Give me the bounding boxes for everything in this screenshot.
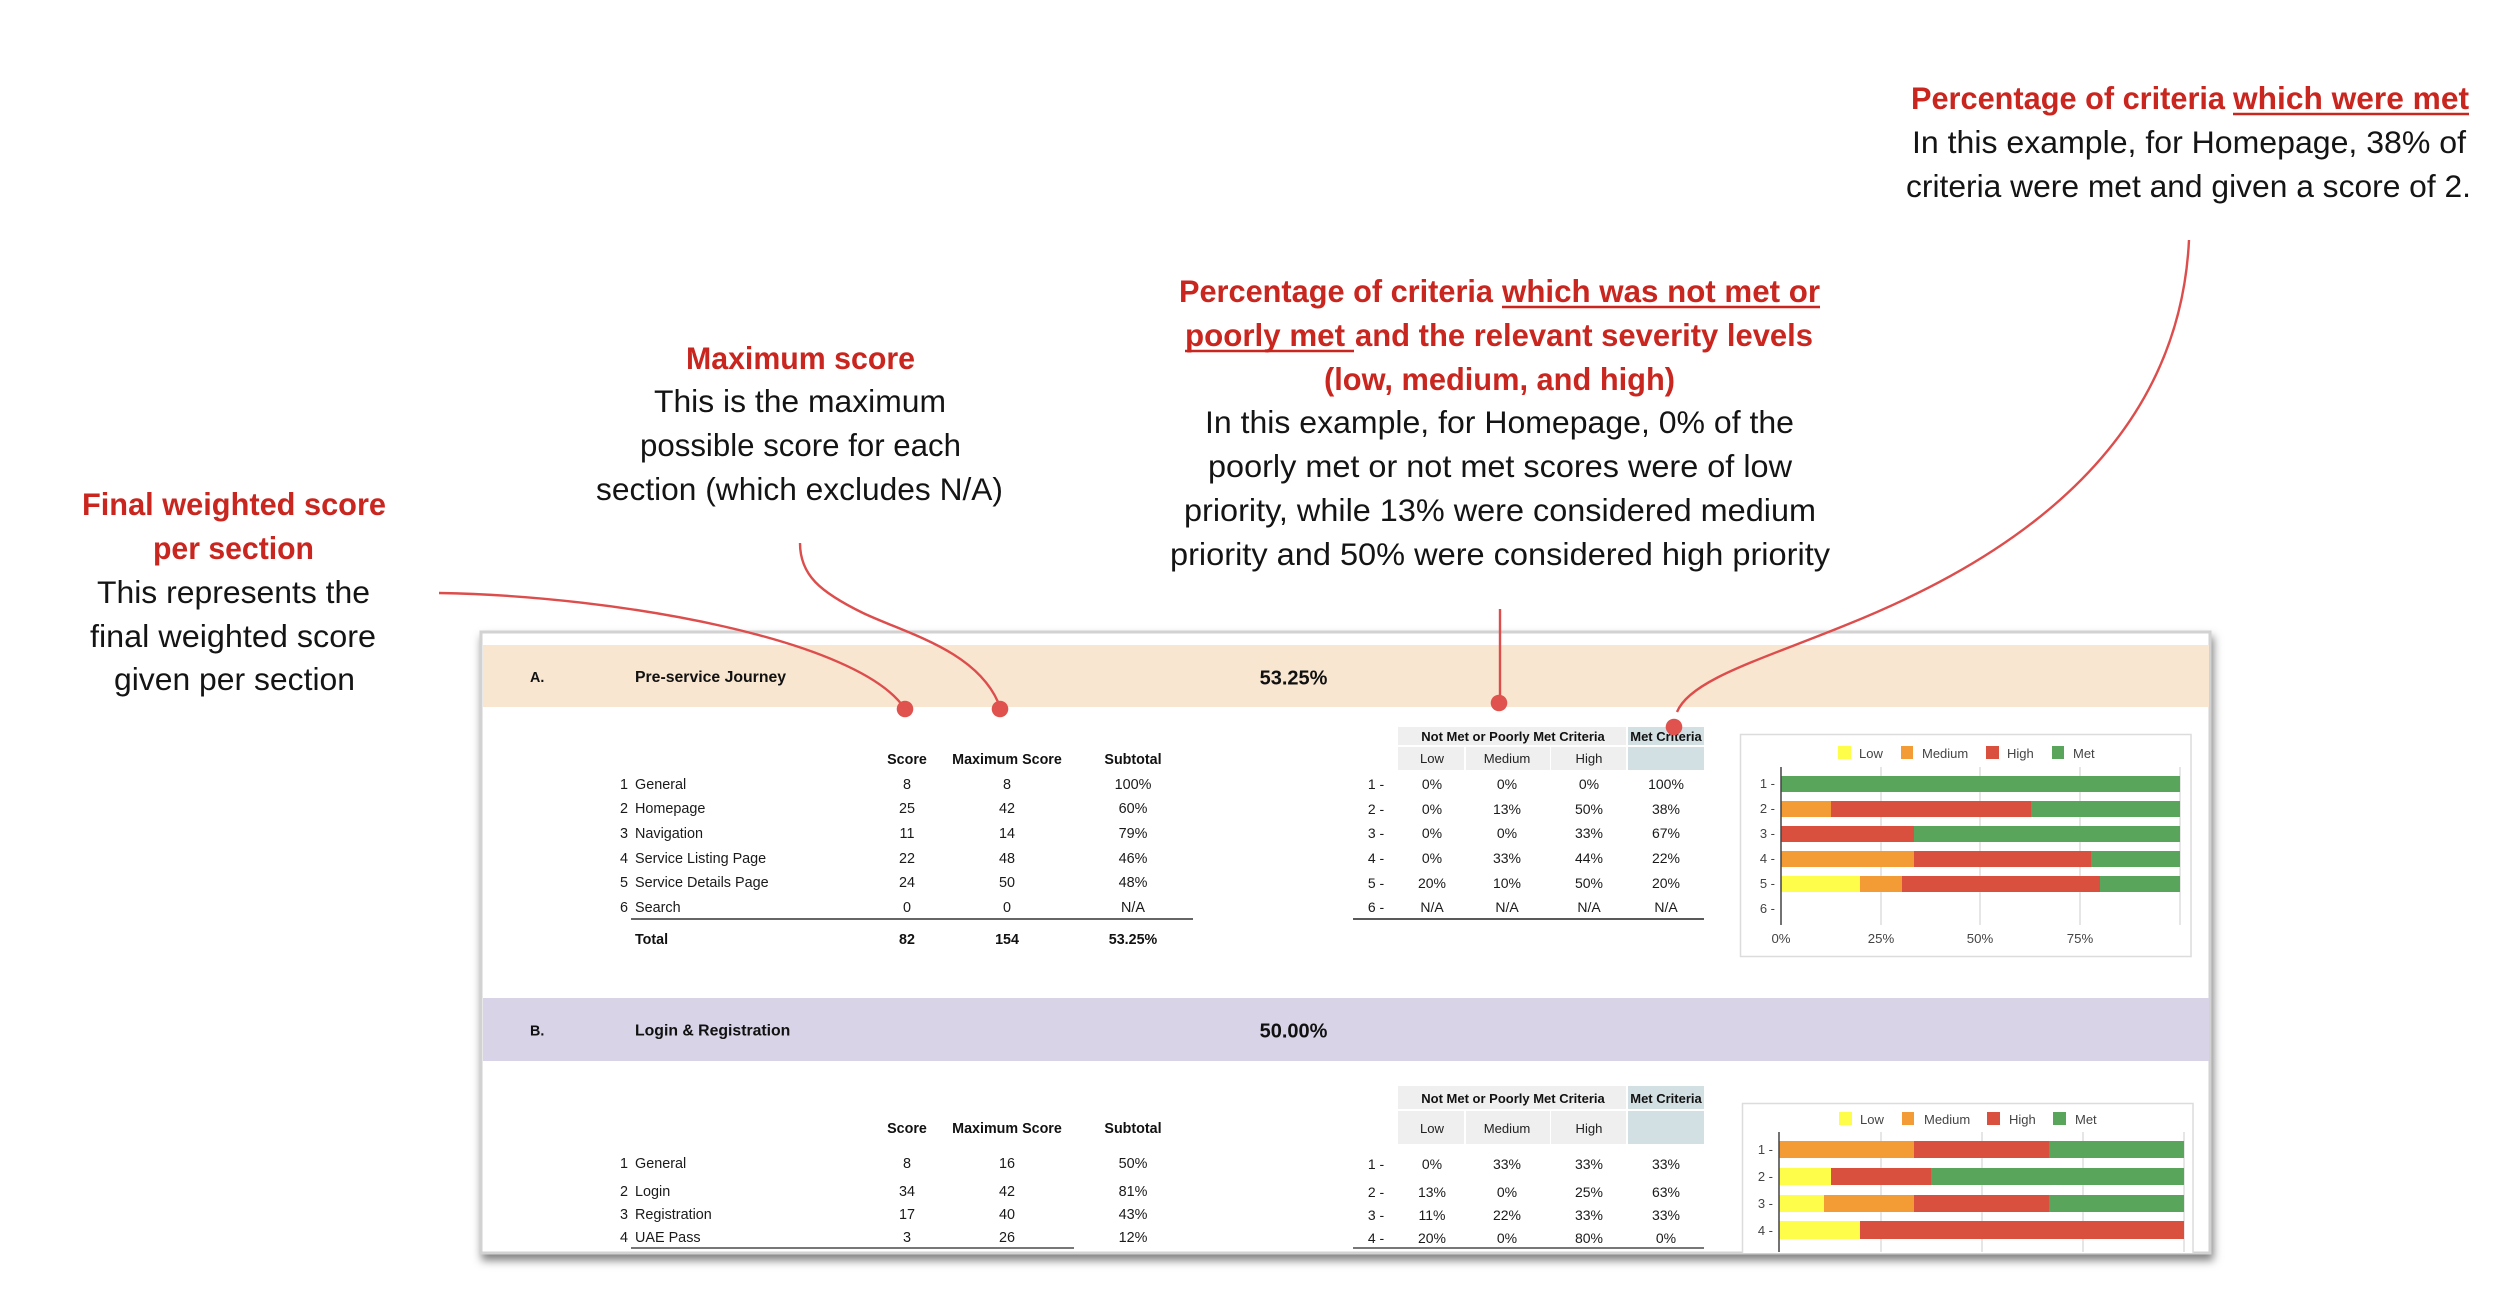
section B criteria table: 2 - — [1368, 1184, 1385, 1200]
section A score table: 48 — [999, 851, 1015, 867]
callout: final weighted score — [82, 486, 386, 697]
section B criteria table — [1353, 1086, 1704, 1248]
section B criteria table: 3 - — [1368, 1207, 1385, 1223]
section A score table: 8 — [903, 777, 911, 793]
section A score table: 46% — [1119, 851, 1148, 867]
section A score table: General — [635, 777, 686, 793]
description: priority and 50% were considered high priority — [1170, 536, 1830, 572]
description — [596, 383, 1003, 507]
arrow: not met criteria connector — [1491, 609, 1507, 711]
section A score table: 6 — [620, 900, 628, 916]
arrow: met criteria connector — [1666, 240, 2189, 735]
section A score table: 11 — [900, 826, 914, 842]
section B criteria table: 0% — [1422, 1156, 1442, 1172]
section A band — [483, 645, 2209, 707]
section B stacked bar chart: 4 - — [1758, 1223, 1773, 1238]
section A criteria table: 50% — [1575, 801, 1603, 817]
section B score table: 12% — [1119, 1230, 1148, 1246]
section B score table: 4 — [620, 1230, 628, 1246]
section A score table: 79% — [1119, 826, 1148, 842]
chart legend: Met — [2073, 746, 2095, 761]
section A score table: Homepage — [635, 801, 705, 817]
section A stacked bar chart: 1 - — [1760, 776, 1775, 791]
section B score table: General — [635, 1156, 686, 1172]
section A criteria table: N/A — [1420, 899, 1444, 915]
section A criteria table: 10% — [1493, 875, 1521, 891]
heading: which was not met or — [1501, 273, 1820, 309]
description: possible score for each — [640, 427, 961, 463]
section A score table: Service Listing Page — [635, 851, 766, 867]
description: poorly met or not met scores were of low — [1208, 448, 1792, 484]
section B criteria table: 11% — [1419, 1207, 1445, 1223]
section A score table: 24 — [899, 875, 915, 891]
heading: Final weighted score — [82, 486, 386, 522]
section B score table: 17 — [899, 1207, 915, 1223]
section A criteria table — [1353, 727, 1704, 919]
section B stacked bar chart — [1742, 1102, 2194, 1253]
section A stacked bar chart: 25% — [1868, 931, 1894, 946]
section B criteria table: 80% — [1575, 1230, 1603, 1246]
section B criteria table: 20% — [1418, 1230, 1446, 1246]
section A criteria table: 0% — [1579, 776, 1599, 792]
section B score table: 50% — [1119, 1156, 1148, 1172]
section A criteria table: High — [1576, 751, 1602, 766]
section A score table: Subtotal — [1104, 752, 1162, 768]
section A band: A. — [530, 670, 544, 686]
description: priority, while 13% were considered medium — [1184, 492, 1816, 528]
chart legend: High — [2007, 746, 2034, 761]
bar 5 — [1781, 876, 2180, 892]
section A score table: 100% — [1115, 777, 1152, 793]
section B stacked bar chart: 3 - — [1758, 1196, 1773, 1211]
section B score table: 42 — [999, 1184, 1015, 1200]
description: section (which excludes N/A) — [596, 471, 1003, 507]
section A criteria table: 0% — [1497, 776, 1517, 792]
section B criteria table: High — [1576, 1121, 1602, 1136]
section B criteria table: 33% — [1493, 1156, 1521, 1172]
section B stacked bar chart: 2 - — [1758, 1169, 1773, 1184]
bar 1 — [1781, 776, 2180, 792]
arrow: maximum score connector — [800, 543, 1008, 717]
section A score table: 1 — [620, 777, 628, 793]
section A score table: 82 — [899, 932, 915, 948]
section A stacked bar chart: 75% — [2067, 931, 2093, 946]
panel: scorecard screenshot — [481, 632, 2210, 1274]
section B score table: Login — [635, 1184, 670, 1200]
heading — [82, 486, 386, 566]
section A band: 53.25% — [1260, 668, 1328, 690]
description: given per section — [114, 661, 355, 697]
section B score table: 16 — [999, 1156, 1015, 1172]
section B score table: 8 — [903, 1156, 911, 1172]
section B criteria table: 33% — [1575, 1156, 1603, 1172]
section A criteria table: Met Criteria — [1630, 729, 1703, 744]
section B criteria table: 25% — [1575, 1184, 1603, 1200]
section B score table: Subtotal — [1104, 1121, 1162, 1137]
section A stacked bar chart: 6 - — [1760, 901, 1775, 916]
section A criteria table: 100% — [1648, 776, 1684, 792]
section B score table: 2 — [620, 1184, 628, 1200]
section B stacked bar chart: 1 - — [1758, 1142, 1773, 1157]
section A score table: 5 — [620, 875, 628, 891]
section A score table: 8 — [1003, 777, 1011, 793]
section A stacked bar chart — [1740, 734, 2191, 956]
section B score table: 3 — [620, 1207, 628, 1223]
section A stacked bar chart: 0% — [1771, 931, 1791, 946]
section A score table — [620, 752, 1193, 948]
description: criteria were met and given a score of 2. — [1906, 168, 2471, 204]
section B score table: 1 — [620, 1156, 628, 1172]
section A criteria table: Low — [1420, 751, 1445, 766]
section B criteria table: 4 - — [1368, 1230, 1385, 1246]
section A score table: 154 — [995, 932, 1019, 948]
section B band: 50.00% — [1260, 1020, 1328, 1042]
chart legend — [1838, 746, 2095, 761]
section B band — [483, 998, 2209, 1061]
heading: which were met — [2232, 80, 2470, 116]
section B criteria table: 0% — [1656, 1230, 1676, 1246]
section B score table: 3 — [903, 1230, 911, 1246]
section A stacked bar chart: 2 - — [1760, 801, 1775, 816]
chart legend: Medium — [1922, 746, 1968, 761]
heading — [1911, 80, 2470, 116]
description: In this example, for Homepage, 38% of — [1912, 124, 2466, 160]
section B score table: Score — [887, 1121, 927, 1137]
section B criteria table: 13% — [1418, 1184, 1446, 1200]
section B criteria table: Medium — [1484, 1121, 1530, 1136]
section A score table: Maximum Score — [952, 752, 1062, 768]
section B criteria table: 63% — [1652, 1184, 1680, 1200]
section B score table: 81% — [1119, 1184, 1148, 1200]
section A score table: 3 — [620, 826, 628, 842]
callout: criteria which were met — [1906, 80, 2471, 204]
section A criteria table: 3 - — [1368, 825, 1385, 841]
section B criteria table: 1 - — [1368, 1156, 1385, 1172]
heading: (low, medium, and high) — [1324, 361, 1675, 397]
section A band: Pre-service Journey — [635, 669, 786, 686]
section A criteria table: 6 - — [1368, 899, 1385, 915]
description: This represents the — [97, 574, 370, 610]
section A criteria table: N/A — [1654, 899, 1678, 915]
chart legend: Low — [1860, 1112, 1884, 1127]
section A criteria table: N/A — [1577, 899, 1601, 915]
section B score table: 43% — [1119, 1207, 1148, 1223]
section B criteria table: 0% — [1497, 1184, 1517, 1200]
description: This is the maximum — [654, 383, 946, 419]
section B score table: UAE Pass — [635, 1230, 701, 1246]
section A score table: 0 — [1003, 900, 1011, 916]
section B score table: 40 — [999, 1207, 1015, 1223]
heading: Percentage of criteria — [1911, 80, 2225, 116]
bar 2 — [1779, 1168, 2184, 1185]
section A criteria table: 0% — [1422, 801, 1442, 817]
chart legend: Met — [2075, 1112, 2097, 1127]
section B criteria table: 22% — [1493, 1207, 1521, 1223]
heading: and the relevant severity levels — [1355, 317, 1813, 353]
chart legend: Low — [1859, 746, 1883, 761]
section B criteria table: Low — [1420, 1121, 1445, 1136]
section A criteria table: 0% — [1422, 776, 1442, 792]
chart legend: Medium — [1924, 1112, 1970, 1127]
section A criteria table: 67% — [1652, 825, 1680, 841]
section A criteria table: 44% — [1575, 850, 1603, 866]
section B criteria table: Not Met or Poorly Met Criteria — [1421, 1091, 1606, 1106]
section B score table: 26 — [999, 1230, 1015, 1246]
section A score table: 60% — [1119, 801, 1148, 817]
section A score table: 14 — [999, 826, 1015, 842]
section A score table: 4 — [620, 851, 628, 867]
section A criteria table: 33% — [1575, 825, 1603, 841]
section B criteria table: Met Criteria — [1630, 1091, 1703, 1106]
section A stacked bar chart: 50% — [1967, 931, 1993, 946]
section B criteria table: 33% — [1652, 1207, 1680, 1223]
section B score table: Maximum Score — [952, 1121, 1062, 1137]
section A criteria table: 0% — [1422, 825, 1442, 841]
section A criteria table: 5 - — [1368, 875, 1385, 891]
section A criteria table: 1 - — [1368, 776, 1385, 792]
section B score table — [620, 1121, 1162, 1248]
heading — [1179, 273, 1820, 397]
bar 3 — [1781, 826, 2180, 842]
section A score table: Service Details Page — [635, 875, 769, 891]
bar 1 — [1779, 1141, 2184, 1158]
chart legend: High — [2009, 1112, 2036, 1127]
section A score table: N/A — [1121, 900, 1145, 916]
section A score table: 25 — [899, 801, 915, 817]
chart legend — [1839, 1112, 2097, 1127]
bar 2 — [1781, 801, 2180, 817]
callout: maximum score — [596, 340, 1003, 507]
description — [1906, 124, 2471, 204]
heading: poorly met — [1185, 317, 1345, 353]
section A criteria table: 20% — [1652, 875, 1680, 891]
section A stacked bar chart: 4 - — [1760, 851, 1775, 866]
section A criteria table: 2 - — [1368, 801, 1385, 817]
heading: per section — [153, 530, 314, 566]
section A criteria table: Not Met or Poorly Met Criteria — [1421, 729, 1606, 744]
callout: not met or poorly met criteria — [1170, 273, 1830, 572]
section A criteria table: N/A — [1495, 899, 1519, 915]
heading: Maximum score — [686, 340, 915, 376]
section B criteria table: 33% — [1652, 1156, 1680, 1172]
section A score table: 0 — [903, 900, 911, 916]
section B band: Login & Registration — [635, 1022, 790, 1040]
section A criteria table: 0% — [1497, 825, 1517, 841]
section A score table: 2 — [620, 801, 628, 817]
section A score table: 42 — [999, 801, 1015, 817]
description: In this example, for Homepage, 0% of the — [1205, 404, 1794, 440]
bar 4 — [1779, 1221, 2184, 1239]
section B criteria table: 33% — [1575, 1207, 1603, 1223]
section A stacked bar chart: 3 - — [1760, 826, 1775, 841]
section B band: B. — [530, 1024, 544, 1040]
section A criteria table: 20% — [1418, 875, 1446, 891]
section A score table: 50 — [999, 875, 1015, 891]
description — [1170, 404, 1830, 572]
section B criteria table: 0% — [1497, 1230, 1517, 1246]
section A criteria table: 13% — [1493, 801, 1521, 817]
section A score table: Total — [635, 932, 668, 948]
section A criteria table: 0% — [1422, 850, 1442, 866]
section A score table: 22 — [899, 851, 915, 867]
section B score table: 34 — [899, 1184, 915, 1200]
heading: Percentage of criteria — [1179, 273, 1493, 309]
section A score table: 48% — [1119, 875, 1148, 891]
section B score table: Registration — [635, 1207, 712, 1223]
section A criteria table: 38% — [1652, 801, 1680, 817]
section A score table: Navigation — [635, 826, 703, 842]
section A score table: Score — [887, 752, 927, 768]
section A criteria table: 22% — [1652, 850, 1680, 866]
section A criteria table: 4 - — [1368, 850, 1385, 866]
section A criteria table: 33% — [1493, 850, 1521, 866]
bar 3 — [1779, 1195, 2184, 1212]
section A criteria table: Medium — [1484, 751, 1530, 766]
section A stacked bar chart: 5 - — [1760, 876, 1775, 891]
bar 4 — [1781, 851, 2180, 867]
section A score table: Search — [635, 900, 681, 916]
section A criteria table: 50% — [1575, 875, 1603, 891]
description: final weighted score — [90, 618, 376, 654]
description — [90, 574, 376, 697]
arrow: final weighted score connector — [439, 593, 913, 717]
section A score table: 53.25% — [1109, 932, 1158, 948]
